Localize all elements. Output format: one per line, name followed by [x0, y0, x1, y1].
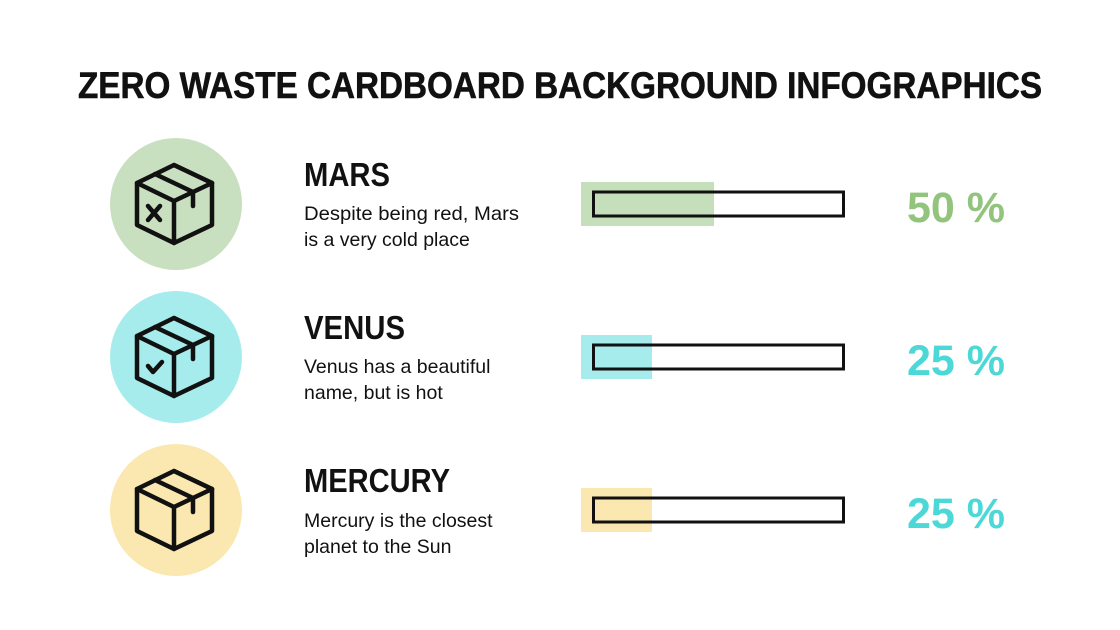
text: mercury description: Mercury is the closest: [304, 510, 493, 532]
heading: mars: MARS: [304, 156, 390, 193]
value: venus: 25 %: [907, 337, 1005, 385]
heading: mercury: MERCURY: [304, 462, 450, 499]
bar: venus: [581, 335, 844, 379]
row: mercury: [110, 444, 1005, 576]
text: venus description: name, but is hot: [304, 382, 443, 404]
heading: venus: VENUS: [304, 309, 405, 346]
icon: mercury box: [110, 444, 242, 576]
title: ZERO WASTE CARDBOARD BACKGROUND INFOGRAPHICS: [78, 65, 1042, 106]
row: venus: [110, 291, 1005, 423]
bar: mercury: [581, 488, 844, 532]
icon: venus box: [110, 291, 242, 423]
icon: mars box: [110, 138, 242, 270]
text: mars description: is a very cold place: [304, 229, 470, 251]
value: mars: 50 %: [907, 184, 1005, 232]
text: venus description: Venus has a beautiful: [304, 356, 490, 378]
value: mercury: 25 %: [907, 490, 1005, 538]
text: mercury description: planet to the Sun: [304, 536, 451, 558]
bar: mars: [581, 182, 844, 226]
text: mars description: Despite being red, Mars: [304, 203, 519, 225]
row: mars: [110, 138, 1005, 270]
